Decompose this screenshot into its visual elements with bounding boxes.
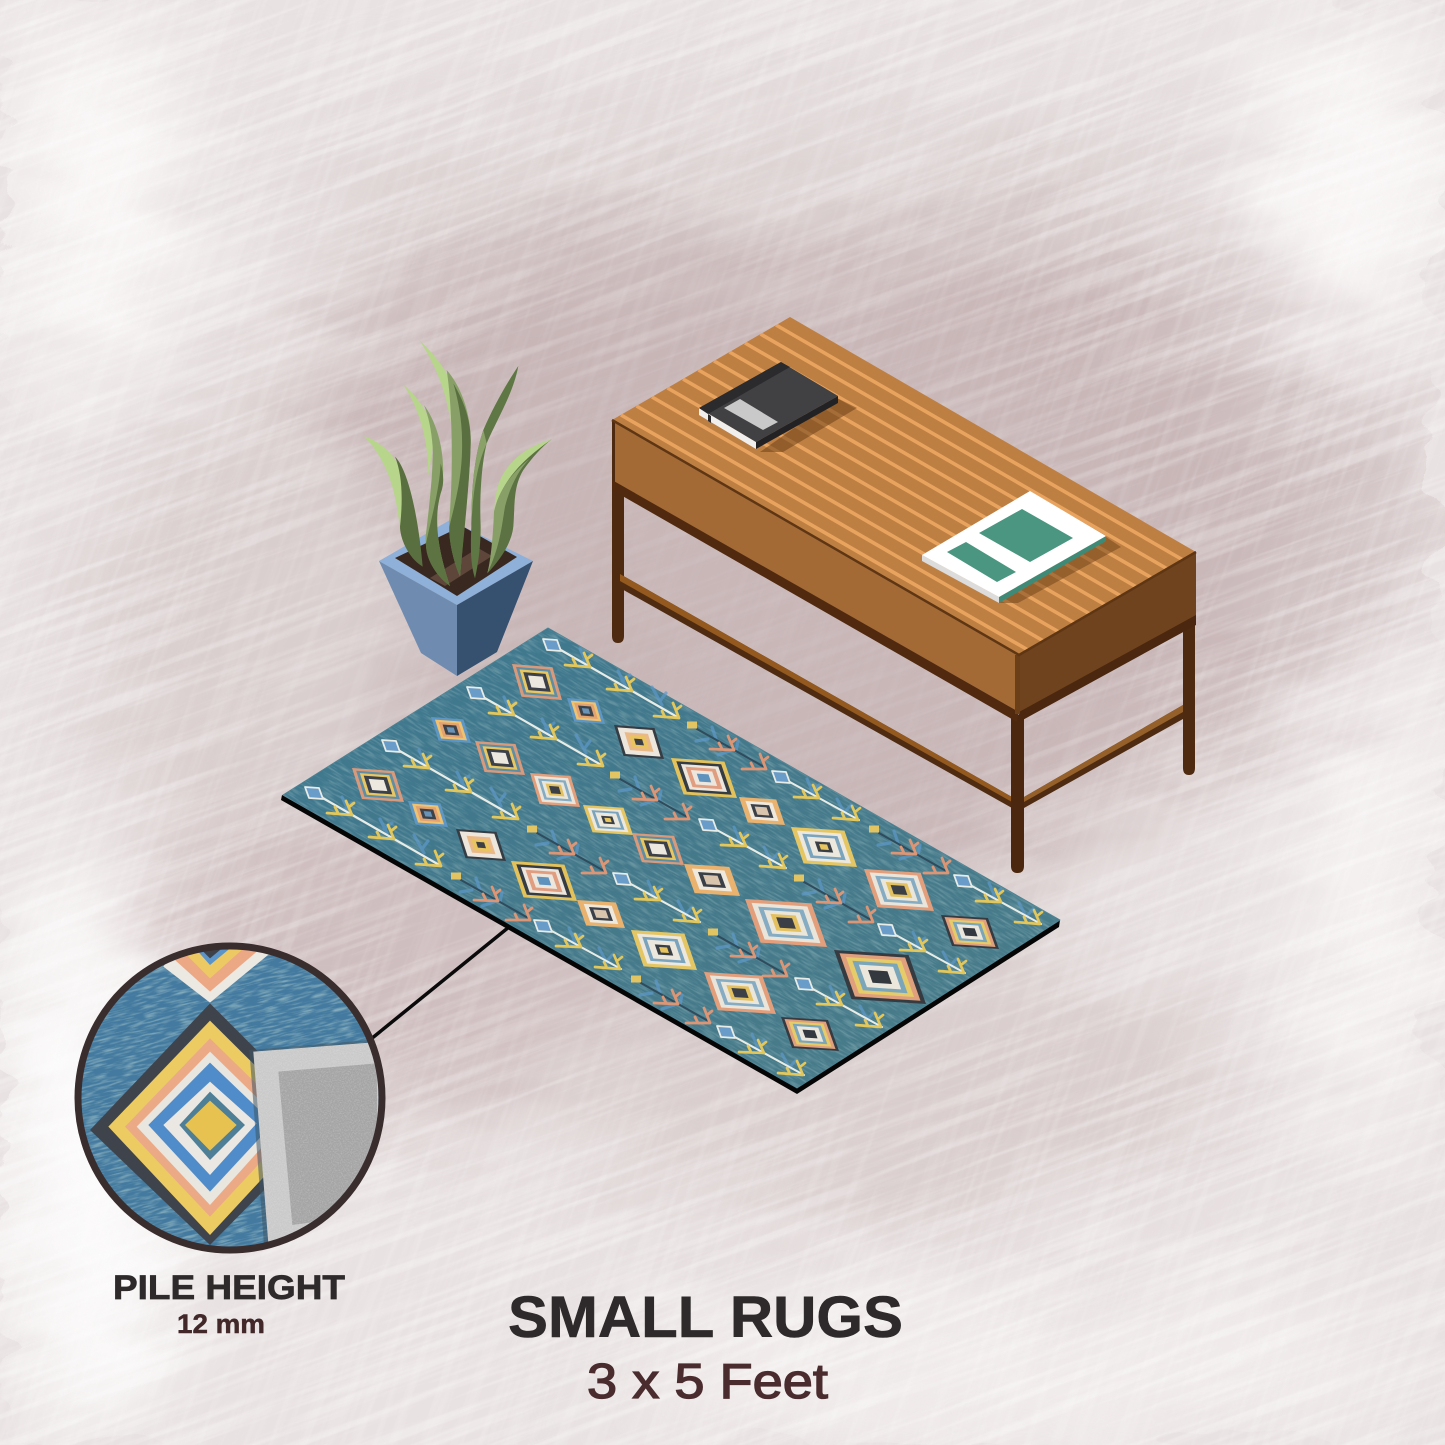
connector line from inset to rug (371, 927, 509, 1039)
pot faces (379, 561, 533, 676)
pot back rim and soil (379, 520, 533, 605)
magazine with green blocks (922, 491, 1121, 603)
folded rug corner backing (249, 1030, 378, 1245)
subtitle: 3 x 5 feet: 3 x 5 Feet (587, 1355, 828, 1409)
table right back leg (1183, 620, 1195, 775)
right apron rail (1019, 615, 1196, 722)
table top with stripes (612, 317, 1196, 655)
right drawer face (1019, 552, 1196, 714)
left apron rail (612, 480, 1019, 722)
short stretcher (1024, 705, 1183, 808)
long stretcher (620, 574, 1012, 808)
plant in blue pot (364, 340, 552, 676)
left drawer face (615, 422, 1019, 712)
table (612, 317, 1196, 873)
table back-left leg (612, 420, 624, 643)
title: small rugs: SMALL RUGS (508, 1285, 903, 1350)
table front leg (1011, 715, 1024, 873)
plant leaves (364, 340, 552, 586)
rug (281, 628, 1060, 1094)
main diamond concentric rings (90, 1004, 264, 1245)
label: pile height: PILE HEIGHT (113, 1269, 345, 1307)
rug diamonds (352, 664, 999, 1051)
label: 12 mm: 12 mm (177, 1309, 265, 1339)
book: dark notebook (699, 362, 857, 452)
upper diamond tip (163, 947, 270, 1003)
rug arrows (305, 639, 1042, 1075)
rug edge thickness (281, 795, 1060, 1094)
inset circle: pile height close-up (78, 946, 382, 1250)
rug body (283, 628, 1060, 1088)
